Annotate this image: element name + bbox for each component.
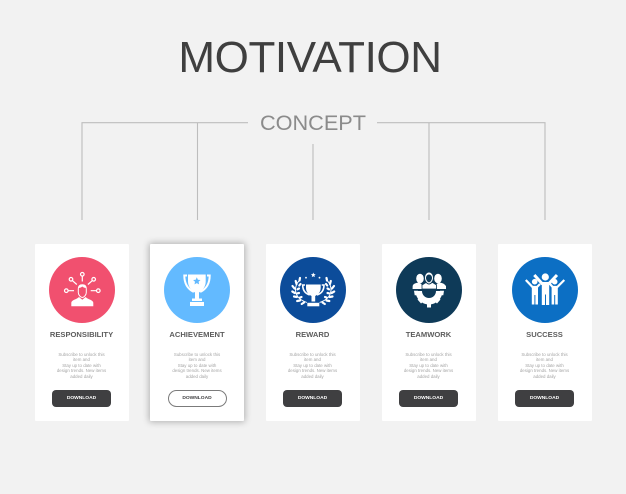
description: added daily [70, 374, 93, 379]
description: Subscribe to unlock this [58, 352, 105, 357]
description: item and [420, 357, 437, 362]
description: added daily [186, 374, 208, 379]
description: added daily [533, 374, 556, 379]
description: design trends. New items [57, 368, 106, 373]
description: Subscribe to unlock this [289, 352, 336, 357]
button [515, 390, 574, 407]
button: DOWNLOAD [67, 396, 96, 401]
description: item and [73, 357, 90, 362]
description: design trends. New items [520, 368, 569, 373]
label: RESPONSIBILITY [50, 330, 113, 338]
description: design trends. New items [404, 368, 453, 373]
icon: people with raised arms [512, 257, 578, 323]
panel: reward [266, 244, 360, 421]
description [57, 352, 106, 379]
button [283, 390, 342, 407]
description: item and [536, 357, 553, 362]
panel: success [498, 244, 592, 421]
button [399, 390, 458, 407]
button [52, 390, 111, 407]
button: DOWNLOAD [298, 396, 327, 401]
button [168, 390, 226, 407]
panel: teamwork [382, 244, 476, 421]
label: SUCCESS [526, 330, 563, 338]
subtitle: CONCEPT [260, 110, 366, 135]
description: Stay up to date with [409, 363, 448, 368]
description [288, 352, 337, 379]
icon: team over gear [396, 257, 462, 323]
label: ACHIEVEMENT [169, 330, 225, 338]
panel: responsibility [34, 244, 128, 421]
description: Stay up to date with [293, 363, 332, 368]
icon: person with network nodes [49, 257, 115, 323]
description [520, 352, 569, 379]
description: added daily [417, 374, 440, 379]
label: TEAMWORK [406, 330, 451, 338]
description: item and [304, 357, 321, 362]
button: DOWNLOAD [530, 396, 559, 401]
description: design trends. New items [172, 368, 222, 373]
description: Stay up to date with [525, 363, 564, 368]
panel: achievement [150, 244, 244, 421]
description: Stay up to date with [178, 363, 216, 368]
label: REWARD [296, 330, 329, 338]
icon: trophy [164, 257, 230, 323]
connector lines [82, 122, 546, 220]
description: added daily [301, 374, 324, 379]
icon: trophy with laurel [280, 257, 346, 323]
description: Stay up to date with [62, 363, 101, 368]
description [172, 352, 222, 379]
button: DOWNLOAD [414, 396, 443, 401]
title: MOTIVATION [178, 33, 442, 82]
description: Subscribe to unlock this [405, 352, 452, 357]
description: item and [189, 357, 205, 362]
description: Subscribe to unlock this [521, 352, 568, 357]
description: Subscribe to unlock this [174, 352, 220, 357]
description [404, 352, 453, 379]
description: design trends. New items [288, 368, 337, 373]
button: DOWNLOAD [182, 396, 212, 401]
